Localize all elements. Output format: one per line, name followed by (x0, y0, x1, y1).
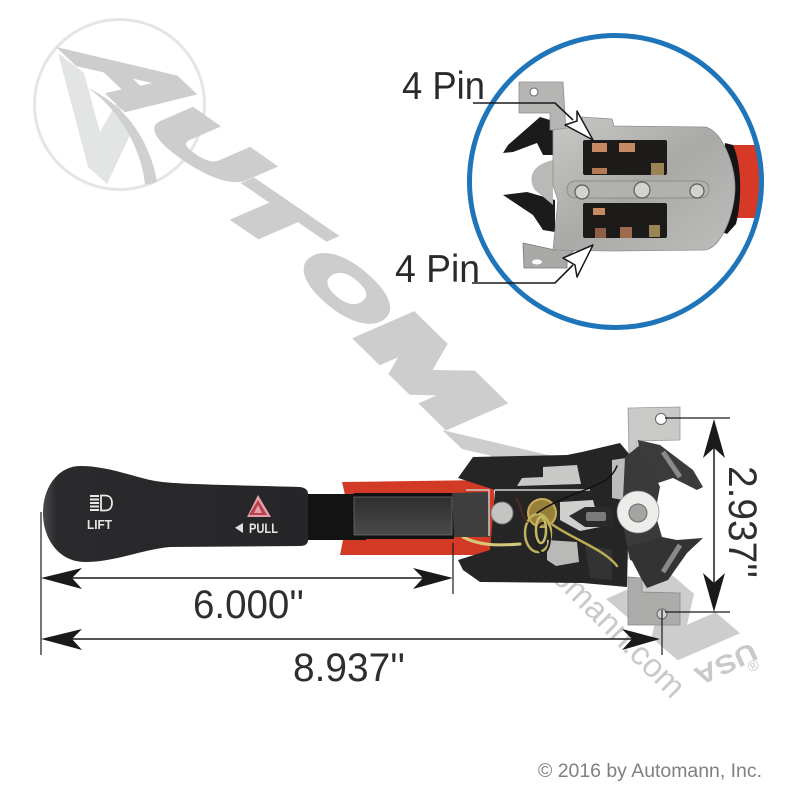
lower dark block (585, 545, 612, 580)
red handle stub (733, 145, 759, 218)
value: 2.937'' (720, 466, 764, 578)
upper claw (638, 440, 703, 490)
black collar (722, 143, 740, 234)
watermark: AUTOMANN wordmark: N (513, 479, 675, 581)
capacitor (491, 502, 513, 524)
dimension: 2.937 inches (665, 418, 764, 612)
callout: upper 4 Pin label: 4 Pin (402, 65, 485, 108)
top bracket hole (530, 88, 538, 96)
watermark: AUTOMANN wordmark: T (193, 175, 348, 262)
brass ring (528, 499, 556, 527)
pull arrow (235, 523, 243, 533)
callout: upper 4 Pin label (402, 65, 593, 140)
product: top mounting bracket (628, 407, 680, 455)
silver rail (495, 489, 590, 491)
lower black claw (503, 192, 555, 232)
hex socket bolt (629, 504, 647, 522)
panel: connector detail inset (470, 36, 763, 328)
lower claw (627, 537, 703, 588)
watermark: registered symbol: ® (744, 656, 763, 676)
PULL label: PULL (249, 520, 278, 536)
copyright notice: © 2016 by Automann, Inc. (538, 761, 762, 782)
LIFT label: LIFT (87, 517, 112, 532)
lower connector window (583, 203, 667, 238)
washer (617, 491, 659, 533)
value: 8.937'' (293, 646, 405, 690)
callout: lower 4 Pin label: 4 Pin (395, 248, 480, 291)
silver clip (466, 490, 489, 536)
arrow: bottom end (703, 573, 725, 612)
watermark: AUTOMANN wordmark: A (422, 431, 627, 499)
copper pins (592, 143, 664, 238)
upper connector window (583, 140, 667, 175)
product: black knob handle (43, 466, 308, 562)
silver upright (612, 458, 626, 500)
top mounting bracket (519, 82, 566, 130)
bottom mounting bracket (523, 243, 575, 268)
bottom bracket hole (532, 260, 542, 264)
inset ring (470, 36, 762, 328)
watermark: AUTOMANN wordmark: A (36, 48, 241, 116)
pointer slot (586, 512, 606, 521)
bracket hole (656, 414, 666, 424)
arrow: left end (41, 629, 82, 650)
metal housing (553, 117, 735, 251)
product: wiring (463, 466, 617, 566)
red lever housing (340, 480, 494, 555)
icon: headlight (90, 496, 112, 510)
watermark: AUTOMANN wordmark: M (338, 304, 522, 437)
product: cam plate and claws (617, 440, 703, 588)
watermark: USA mark: USA (689, 637, 762, 692)
lower spring (663, 545, 680, 572)
product: bottom mounting bracket (628, 577, 680, 625)
cam plate (622, 445, 662, 565)
icon: hazard triangle (247, 495, 271, 517)
shaft end block (452, 492, 490, 537)
arrow: left end (41, 568, 82, 589)
central light plate (560, 500, 600, 531)
arrow: right end (622, 629, 660, 650)
arrow: right end (413, 568, 453, 589)
arrow: top end (703, 419, 725, 458)
upper black claw (503, 117, 555, 155)
watermark: website address: www.automann.com (456, 468, 693, 705)
metal strap (567, 181, 709, 198)
shaft arm (354, 493, 454, 539)
watermark: AUTOMANN wordmark: N (592, 565, 754, 667)
product: switch assembly body (340, 443, 630, 587)
arrow: to lower connector (563, 245, 593, 277)
watermark: AUTOMANN wordmark: U (126, 100, 292, 196)
dimension: 8.937 inches (41, 610, 662, 690)
watermark: AUTOMANN wordmark (36, 48, 754, 667)
screws (575, 182, 704, 199)
bracket hole (657, 609, 667, 619)
callout: lower 4 Pin label (395, 245, 593, 291)
value: 6.000'' (193, 583, 304, 627)
housing centre lobe (531, 160, 553, 205)
housing base (458, 443, 630, 587)
arrow: to upper connector (565, 111, 593, 140)
watermark: AUTOMANN wordmark: O (279, 237, 413, 341)
lower silver plate (547, 540, 579, 566)
product: handle shaft (306, 490, 490, 540)
pointer (569, 507, 613, 527)
upper silver plate (517, 465, 581, 486)
watermark: circular logo (34, 20, 204, 190)
shaft highlight panel (354, 497, 452, 535)
dimension: 6.000 inches (41, 512, 453, 655)
upper spring (663, 452, 680, 477)
